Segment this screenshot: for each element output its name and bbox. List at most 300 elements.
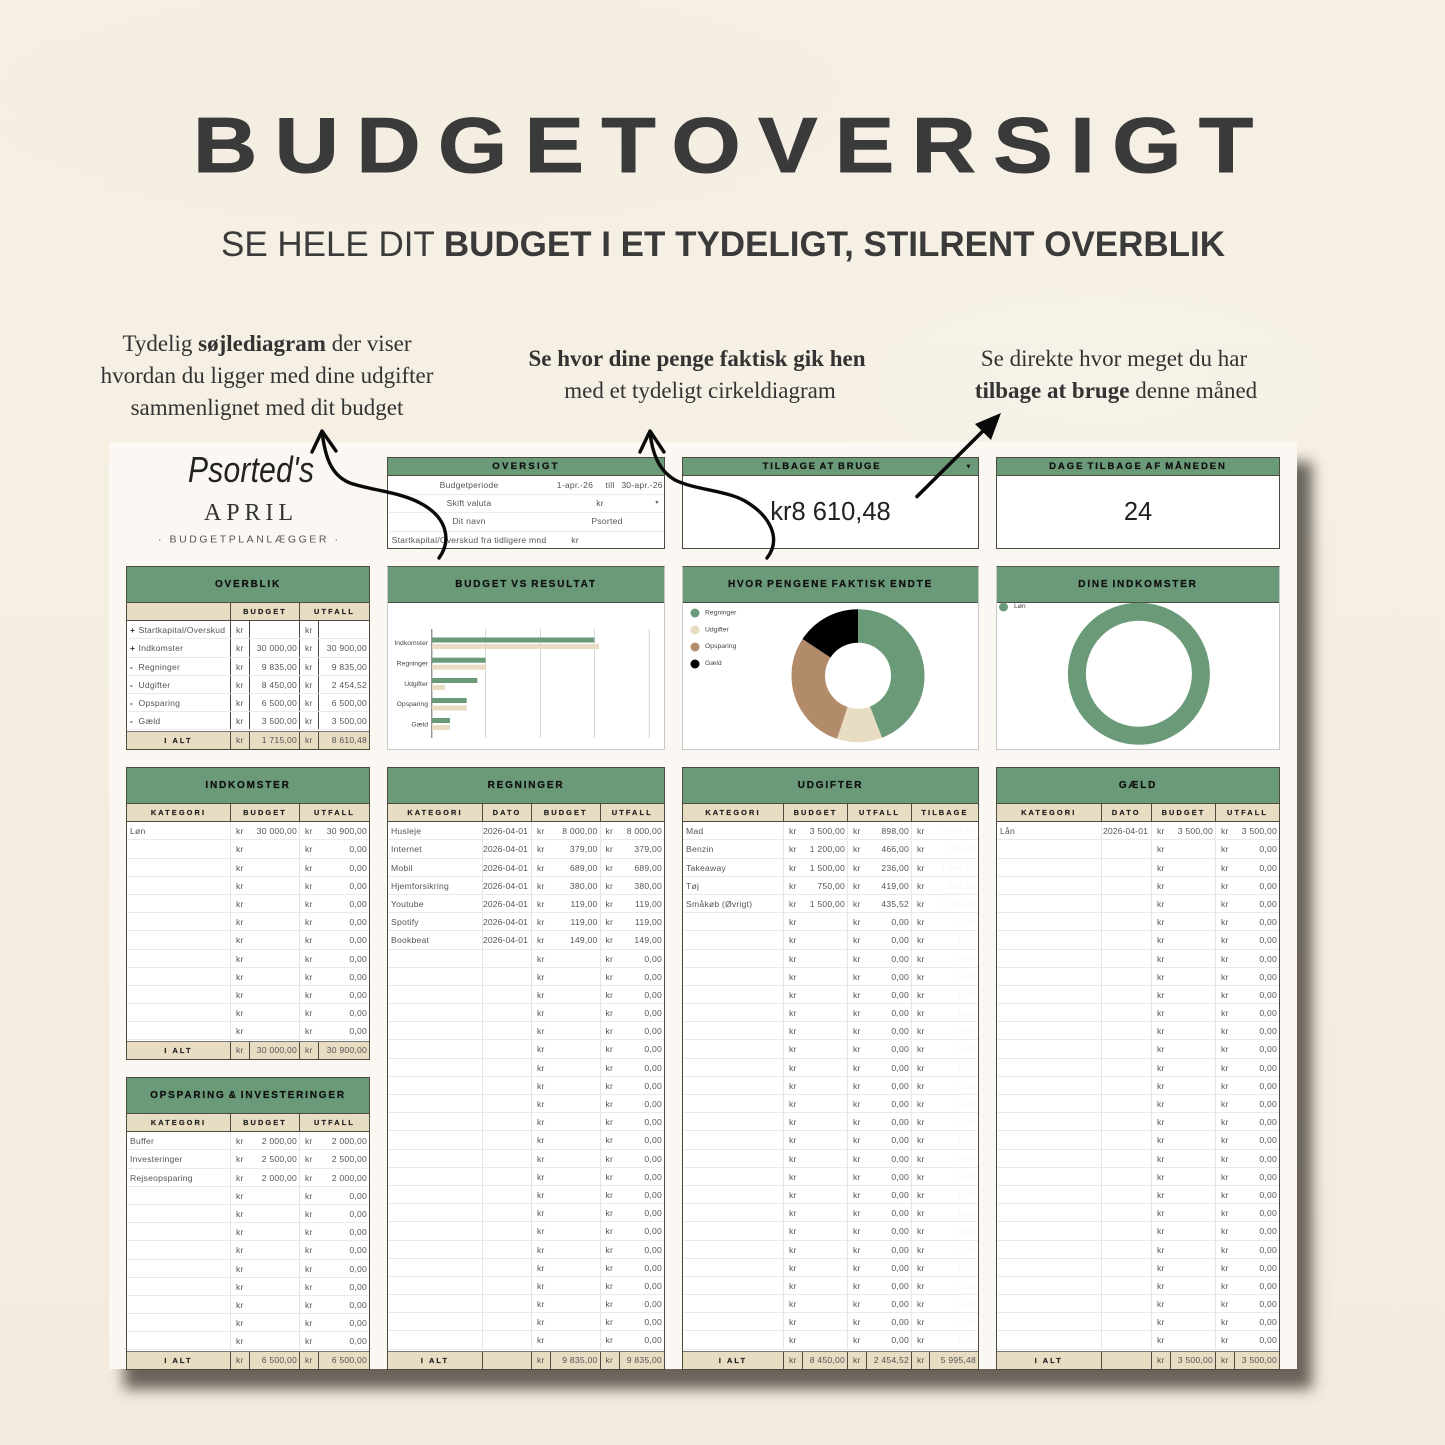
- udgifter rows: kr: [789, 1026, 797, 1036]
- gæld rows: 0,00: [1259, 1117, 1277, 1127]
- gæld rows: kr: [1157, 1208, 1165, 1218]
- udgifter rows: kr: [853, 1026, 861, 1036]
- udgifter rows: kr: [917, 1172, 925, 1182]
- udgifter rows: 0,00: [958, 1281, 976, 1291]
- udgifter rows: 0,00: [958, 935, 976, 945]
- gæld rows: kr: [1157, 954, 1165, 964]
- gæld rows: kr: [1221, 1299, 1229, 1309]
- udgifter rows: Benzin: [686, 844, 714, 854]
- udgifter rows: kr: [917, 1335, 925, 1345]
- opsparing rows: kr: [305, 1336, 313, 1346]
- income legend: Løn: [1014, 603, 1026, 610]
- regninger rows: kr: [537, 972, 545, 982]
- regninger rows: kr: [606, 844, 613, 854]
- oversigt row: valuta: [388, 494, 664, 513]
- regninger rows: kr: [537, 826, 545, 836]
- overblik rows: kr: [236, 643, 244, 653]
- udgifter rows: kr: [789, 954, 797, 964]
- regninger rows: kr: [606, 990, 613, 1000]
- gæld rows: kr: [1157, 972, 1165, 982]
- overblik rows: 30 000,00: [257, 643, 297, 653]
- regninger rows: kr: [606, 935, 613, 945]
- gæld rows: 0,00: [1259, 1099, 1277, 1109]
- overblik total: 8 610,48: [332, 735, 367, 745]
- oversigt row: valuta: ▾: [655, 500, 659, 506]
- indkomster rows: kr: [305, 935, 313, 945]
- gæld rows: 3 500,00: [1178, 826, 1213, 836]
- gæld rows: kr: [1157, 917, 1165, 927]
- regninger rows: kr: [537, 1317, 545, 1327]
- opsparing rows: 2 500,00: [332, 1154, 367, 1164]
- panel: hvor pengene faktisk endte: [682, 566, 979, 750]
- gæld rows: 0,00: [1259, 1317, 1277, 1327]
- udgifter rows: kr: [917, 1008, 925, 1018]
- heading: gæld: [997, 768, 1279, 804]
- udgifter rows: kr: [853, 1044, 861, 1054]
- opsparing rows: kr: [305, 1154, 313, 1164]
- gæld rows: 0,00: [1259, 1226, 1277, 1236]
- overblik rows: Gæld: [138, 716, 160, 726]
- udgifter rows: kr: [789, 1172, 797, 1182]
- gæld rows: kr: [1221, 1135, 1229, 1145]
- udgifter rows: kr: [789, 1299, 797, 1309]
- income legend: [999, 602, 1026, 612]
- oversigt row: startkapital: Startkapital/Overskud fra tidligere mnd: [392, 535, 546, 545]
- udgifter rows: 734,00: [948, 844, 976, 854]
- udgifter rows: Takeaway: [686, 863, 726, 873]
- regninger rows: 689,00: [570, 863, 598, 873]
- panel: dine indkomster: [996, 566, 1280, 750]
- regninger rows: 0,00: [644, 972, 662, 982]
- panel: regninger: [387, 767, 665, 1370]
- udgifter rows: kr: [789, 935, 797, 945]
- regninger rows: 2026-04-01: [483, 917, 528, 927]
- overblik rows: kr: [305, 716, 313, 726]
- indkomster rows: 0,00: [349, 954, 367, 964]
- regninger rows: Youtube: [391, 899, 424, 909]
- opsparing total: [127, 1351, 369, 1369]
- udgifter rows: 0,00: [891, 917, 909, 927]
- regninger rows: kr: [537, 1026, 545, 1036]
- column headers: udgifter: [683, 804, 978, 822]
- column headers: udgifter: BUDGET: [794, 808, 837, 817]
- regninger rows: kr: [537, 1117, 545, 1127]
- regninger rows: kr: [537, 1208, 545, 1218]
- regninger rows: kr: [537, 954, 545, 964]
- opsparing total: I ALT: [164, 1356, 193, 1365]
- regninger rows: kr: [606, 1063, 613, 1073]
- column headers: regninger: DATO: [493, 808, 521, 817]
- regninger total: 9 835,00: [562, 1355, 598, 1365]
- udgifter rows: 1 200,00: [810, 844, 845, 854]
- gæld rows: kr: [1221, 1081, 1229, 1091]
- regninger rows: kr: [606, 1208, 613, 1218]
- column headers: overblik: [127, 603, 369, 621]
- regninger rows: kr: [537, 1008, 545, 1018]
- callout: søjlediagram: Tydelig søjlediagram der viser: [122, 331, 412, 356]
- indkomster rows: Løn: [130, 826, 145, 836]
- overblik rows: kr: [305, 625, 313, 635]
- regninger rows: kr: [606, 954, 613, 964]
- indkomster rows: 0,00: [349, 899, 367, 909]
- udgifter rows: 0,00: [891, 1135, 909, 1145]
- value: dage tilbage: 24: [1124, 498, 1152, 526]
- udgifter rows: kr: [853, 1081, 861, 1091]
- callout: søjlediagram: hvordan du ligger med dine udgifter: [101, 363, 434, 388]
- udgifter rows: 0,00: [891, 1117, 909, 1127]
- udgifter rows: kr: [917, 1226, 925, 1236]
- gæld rows: kr: [1221, 1117, 1229, 1127]
- column headers: overblik: BUDGET: [243, 607, 287, 616]
- indkomster rows: 0,00: [349, 881, 367, 891]
- udgifter rows: kr: [917, 1044, 925, 1054]
- column headers: udgifter: UTFALL: [859, 808, 900, 817]
- gæld rows: 0,00: [1259, 1063, 1277, 1073]
- gæld rows: 2026-04-01: [1103, 826, 1148, 836]
- regninger rows: 380,00: [634, 881, 662, 891]
- gæld rows: 0,00: [1259, 1263, 1277, 1273]
- indkomster rows: 0,00: [349, 863, 367, 873]
- overblik rows: 9 835,00: [262, 662, 297, 672]
- overblik rows: kr: [305, 643, 313, 653]
- bar chart: budget vs resultat: Indkomster: [394, 640, 429, 647]
- udgifter rows: kr: [789, 1099, 797, 1109]
- udgifter rows: kr: [853, 972, 861, 982]
- regninger rows: 0,00: [644, 1190, 662, 1200]
- udgifter rows: 0,00: [891, 1335, 909, 1345]
- gæld rows: kr: [1221, 1263, 1229, 1273]
- udgifter rows: 0,00: [958, 1317, 976, 1327]
- donut legend: Gæld: [705, 660, 722, 667]
- column headers: indkomster: BUDGET: [243, 808, 287, 817]
- indkomster rows: 0,00: [349, 1026, 367, 1036]
- udgifter rows: 0,00: [891, 1154, 909, 1164]
- regninger rows: kr: [606, 1226, 613, 1236]
- udgifter rows: kr: [917, 972, 925, 982]
- opsparing rows: kr: [236, 1300, 244, 1310]
- regninger rows: Internet: [391, 844, 422, 854]
- column headers: gæld: KATEGORI: [1021, 808, 1076, 817]
- gæld rows: kr: [1157, 881, 1165, 891]
- regninger rows: 0,00: [644, 1172, 662, 1182]
- overblik rows: kr: [236, 698, 244, 708]
- panel: oversigt: [387, 457, 665, 549]
- opsparing rows: Buffer: [130, 1136, 154, 1146]
- gæld rows: kr: [1221, 1335, 1229, 1345]
- heading: dine indkomster: [997, 567, 1279, 603]
- regninger rows: 8 000,00: [562, 826, 598, 836]
- heading: hvor pengene faktisk endte: HVOR PENGENE FAKTISK ENDTE: [728, 579, 933, 590]
- gæld rows: kr: [1157, 826, 1165, 836]
- regninger rows: 149,00: [570, 935, 598, 945]
- opsparing rows: 0,00: [349, 1209, 367, 1219]
- regninger rows: 0,00: [644, 1026, 662, 1036]
- overblik rows: +: [130, 625, 135, 635]
- udgifter rows: kr: [917, 881, 925, 891]
- indkomster rows: 30 000,00: [257, 826, 297, 836]
- udgifter total: [683, 1351, 978, 1369]
- udgifter rows: kr: [789, 1063, 797, 1073]
- panel: udgifter: [682, 767, 979, 1370]
- udgifter rows: kr: [917, 863, 925, 873]
- column headers: gæld: [997, 804, 1279, 822]
- heading: budget vs resultat: BUDGET VS RESULTAT: [455, 579, 597, 590]
- opsparing rows: kr: [236, 1227, 244, 1237]
- udgifter rows: kr: [789, 1226, 797, 1236]
- regninger rows: Bookbeat: [391, 935, 429, 945]
- gæld rows: kr: [1221, 1317, 1229, 1327]
- udgifter rows: 0,00: [891, 1172, 909, 1182]
- udgifter rows: 898,00: [881, 826, 909, 836]
- regninger rows: 0,00: [644, 1154, 662, 1164]
- regninger rows: kr: [537, 1335, 545, 1345]
- heading: opsparing og investeringer: OPSPARING & INVESTERINGER: [150, 1090, 346, 1101]
- udgifter rows: 0,00: [958, 1335, 976, 1345]
- regninger rows: kr: [606, 1099, 613, 1109]
- regninger rows: kr: [606, 917, 613, 927]
- opsparing rows: kr: [236, 1173, 244, 1183]
- regninger rows: 0,00: [644, 1226, 662, 1236]
- gæld rows: kr: [1157, 1335, 1165, 1345]
- udgifter rows: kr: [853, 1063, 861, 1073]
- regninger rows: kr: [537, 844, 545, 854]
- oversigt row: budgetperiode: 30-apr.-26: [621, 480, 663, 490]
- udgifter rows: 1 500,00: [810, 863, 845, 873]
- column headers: udgifter: KATEGORI: [705, 808, 761, 817]
- gæld rows: kr: [1157, 1154, 1165, 1164]
- regninger rows: kr: [606, 1026, 613, 1036]
- udgifter rows: kr: [853, 954, 861, 964]
- gæld rows: kr: [1157, 1317, 1165, 1327]
- udgifter rows: kr: [853, 826, 861, 836]
- oversigt row: budgetperiode: 1-apr.-26: [557, 480, 593, 490]
- opsparing rows: 0,00: [349, 1264, 367, 1274]
- gæld rows: kr: [1221, 863, 1229, 873]
- panel: gæld: [996, 767, 1280, 1370]
- indkomster rows: kr: [236, 881, 244, 891]
- gæld rows: kr: [1221, 1172, 1229, 1182]
- opsparing rows: 2 000,00: [332, 1173, 367, 1183]
- gæld rows: 0,00: [1259, 954, 1277, 964]
- gæld rows: kr: [1157, 1172, 1165, 1182]
- regninger rows: kr: [537, 1263, 545, 1273]
- column headers: regninger: KATEGORI: [407, 808, 463, 817]
- bar chart: budget vs resultat: Gæld: [411, 722, 428, 728]
- oversigt row: startkapital: kr: [571, 535, 579, 545]
- regninger rows: 2026-04-01: [483, 935, 528, 945]
- udgifter rows: kr: [917, 1299, 925, 1309]
- regninger total: [388, 1351, 664, 1369]
- overblik rows: 8 450,00: [262, 680, 297, 690]
- indkomster rows: 0,00: [349, 972, 367, 982]
- udgifter rows: kr: [917, 1063, 925, 1073]
- overblik rows: 6 500,00: [332, 698, 367, 708]
- column headers: indkomster: [127, 804, 369, 822]
- arrow: to tilbage at bruge: [917, 413, 1001, 496]
- gæld rows: 0,00: [1259, 1081, 1277, 1091]
- indkomster rows: kr: [236, 1026, 244, 1036]
- indkomster total: I ALT: [164, 1046, 193, 1055]
- udgifter rows: kr: [853, 1172, 861, 1182]
- udgifter total: kr: [917, 1355, 925, 1365]
- overblik rows: -: [130, 662, 133, 672]
- column headers: gæld: BUDGET: [1162, 808, 1205, 817]
- udgifter rows: 0,00: [958, 1135, 976, 1145]
- udgifter rows: kr: [853, 863, 861, 873]
- udgifter total: I ALT: [719, 1356, 747, 1365]
- overblik rows: -: [130, 716, 133, 726]
- regninger rows: 8 000,00: [627, 826, 662, 836]
- column headers: opsparing: KATEGORI: [151, 1118, 206, 1127]
- udgifter rows: Småkøb (Øvrigt): [686, 899, 752, 909]
- udgifter rows: kr: [853, 917, 861, 927]
- indkomster rows: 0,00: [349, 917, 367, 927]
- opsparing rows: Rejseopsparing: [130, 1173, 193, 1183]
- regninger total: kr: [537, 1355, 545, 1365]
- udgifter rows: 0,00: [891, 1263, 909, 1273]
- opsparing rows: 0,00: [349, 1191, 367, 1201]
- regninger total: 9 835,00: [627, 1355, 662, 1365]
- gæld rows: 0,00: [1259, 1008, 1277, 1018]
- indkomster rows: kr: [305, 826, 313, 836]
- heading: regninger: [388, 768, 664, 804]
- heading: regninger: REGNINGER: [488, 780, 564, 791]
- gæld rows: kr: [1157, 1281, 1165, 1291]
- oversigt row: budgetperiode: till: [606, 480, 614, 490]
- heading: indkomster: [127, 768, 369, 804]
- gæld rows: 0,00: [1259, 881, 1277, 891]
- column headers: udgifter: TILBAGE: [921, 808, 969, 817]
- udgifter rows: 0,00: [958, 1244, 976, 1254]
- udgifter rows: kr: [853, 1299, 861, 1309]
- overblik rows: Indkomster: [138, 643, 183, 653]
- gæld rows: kr: [1221, 1154, 1229, 1164]
- regninger rows: kr: [606, 1244, 613, 1254]
- regninger rows: 379,00: [634, 844, 662, 854]
- panel: budget vs resultat: [387, 566, 665, 750]
- gæld total: kr: [1157, 1355, 1165, 1365]
- overblik rows: +: [130, 643, 135, 653]
- regninger rows: kr: [606, 972, 613, 982]
- heading: gæld: GÆLD: [1119, 780, 1157, 791]
- gæld rows: kr: [1221, 972, 1229, 982]
- regninger rows: 2026-04-01: [483, 826, 528, 836]
- regninger rows: kr: [537, 990, 545, 1000]
- udgifter rows: kr: [789, 1117, 797, 1127]
- gæld rows: kr: [1157, 1044, 1165, 1054]
- udgifter total: 2 454,52: [874, 1355, 909, 1365]
- regninger rows: kr: [537, 1299, 545, 1309]
- overblik total: 1 715,00: [262, 735, 297, 745]
- udgifter rows: 0,00: [958, 1190, 976, 1200]
- udgifter rows: kr: [917, 1135, 925, 1145]
- udgifter rows: 0,00: [891, 954, 909, 964]
- overblik rows: kr: [236, 680, 244, 690]
- regninger rows: Husleje: [391, 826, 421, 836]
- heading: tilbage at bruge: ▾: [967, 464, 970, 470]
- overblik rows: 6 500,00: [262, 698, 297, 708]
- opsparing rows: Investeringer: [130, 1154, 183, 1164]
- udgifter rows: kr: [853, 899, 861, 909]
- gæld rows: kr: [1157, 1135, 1165, 1145]
- oversigt row: valuta: kr: [596, 498, 604, 508]
- indkomster rows: 0,00: [349, 935, 367, 945]
- opsparing rows: kr: [236, 1209, 244, 1219]
- oversigt row: navn: Psorted: [591, 516, 623, 526]
- opsparing rows: 2 000,00: [262, 1136, 297, 1146]
- opsparing rows: 0,00: [349, 1336, 367, 1346]
- overblik rows: kr: [305, 680, 313, 690]
- udgifter rows: kr: [917, 1117, 925, 1127]
- opsparing rows: 0,00: [349, 1282, 367, 1292]
- month heading: APRIL: [204, 500, 293, 526]
- udgifter rows: kr: [853, 1335, 861, 1345]
- column headers: indkomster: KATEGORI: [151, 808, 206, 817]
- indkomster rows: kr: [236, 935, 244, 945]
- gæld rows: kr: [1157, 1299, 1165, 1309]
- overblik rows: kr: [305, 662, 313, 672]
- gæld rows: kr: [1157, 1026, 1165, 1036]
- udgifter rows: 0,00: [958, 1081, 976, 1091]
- overblik total: kr: [305, 735, 313, 745]
- gæld rows: kr: [1157, 1099, 1165, 1109]
- gæld rows: kr: [1221, 826, 1229, 836]
- callout: cirkeldiagram: Se hvor dine penge faktisk gik hen: [529, 346, 866, 371]
- udgifter rows: kr: [853, 1154, 861, 1164]
- udgifter rows: 0,00: [958, 1208, 976, 1218]
- bar chart: budget vs resultat: [394, 629, 649, 738]
- gæld rows: 0,00: [1259, 972, 1277, 982]
- spreadsheet panel: [109, 442, 1297, 1369]
- callout: tilbage at bruge: tilbage at bruge denne måned: [975, 378, 1258, 403]
- heading: oversigt: OVERSIGT: [492, 461, 560, 472]
- udgifter rows: 466,00: [881, 844, 909, 854]
- regninger rows: 379,00: [570, 844, 598, 854]
- gæld rows: kr: [1221, 1244, 1229, 1254]
- indkomster rows: kr: [236, 826, 244, 836]
- opsparing rows: kr: [305, 1245, 313, 1255]
- callout: søjlediagram: sammenlignet med dit budget: [131, 395, 404, 420]
- opsparing rows: kr: [305, 1191, 313, 1201]
- regninger rows: 119,00: [571, 899, 598, 909]
- regninger rows: kr: [537, 1172, 545, 1182]
- overblik rows: Opsparing: [138, 698, 180, 708]
- udgifter rows: 0,00: [958, 1008, 976, 1018]
- regninger rows: 0,00: [644, 1299, 662, 1309]
- regninger rows: 380,00: [570, 881, 598, 891]
- gæld rows: kr: [1157, 1190, 1165, 1200]
- gæld rows: kr: [1157, 1244, 1165, 1254]
- gæld rows: 0,00: [1259, 1026, 1277, 1036]
- indkomster rows: kr: [236, 972, 244, 982]
- udgifter rows: 0,00: [891, 1044, 909, 1054]
- udgifter rows: kr: [789, 917, 797, 927]
- opsparing rows: kr: [305, 1264, 313, 1274]
- udgifter rows: kr: [917, 935, 925, 945]
- overblik rows: kr: [236, 625, 244, 635]
- subtitle: SE HELE DIT BUDGET I ET TYDELIGT, STILRENT OVERBLIK: [221, 225, 1225, 264]
- regninger rows: kr: [606, 1135, 613, 1145]
- overblik rows: [127, 621, 369, 730]
- gæld total: [997, 1351, 1279, 1369]
- overblik rows: kr: [236, 662, 244, 672]
- regninger rows: 0,00: [644, 1135, 662, 1145]
- indkomster rows: 30 900,00: [327, 826, 367, 836]
- udgifter rows: 0,00: [958, 1044, 976, 1054]
- regninger rows: kr: [537, 1281, 545, 1291]
- udgifter rows: 0,00: [891, 972, 909, 982]
- udgifter rows: 0,00: [958, 1117, 976, 1127]
